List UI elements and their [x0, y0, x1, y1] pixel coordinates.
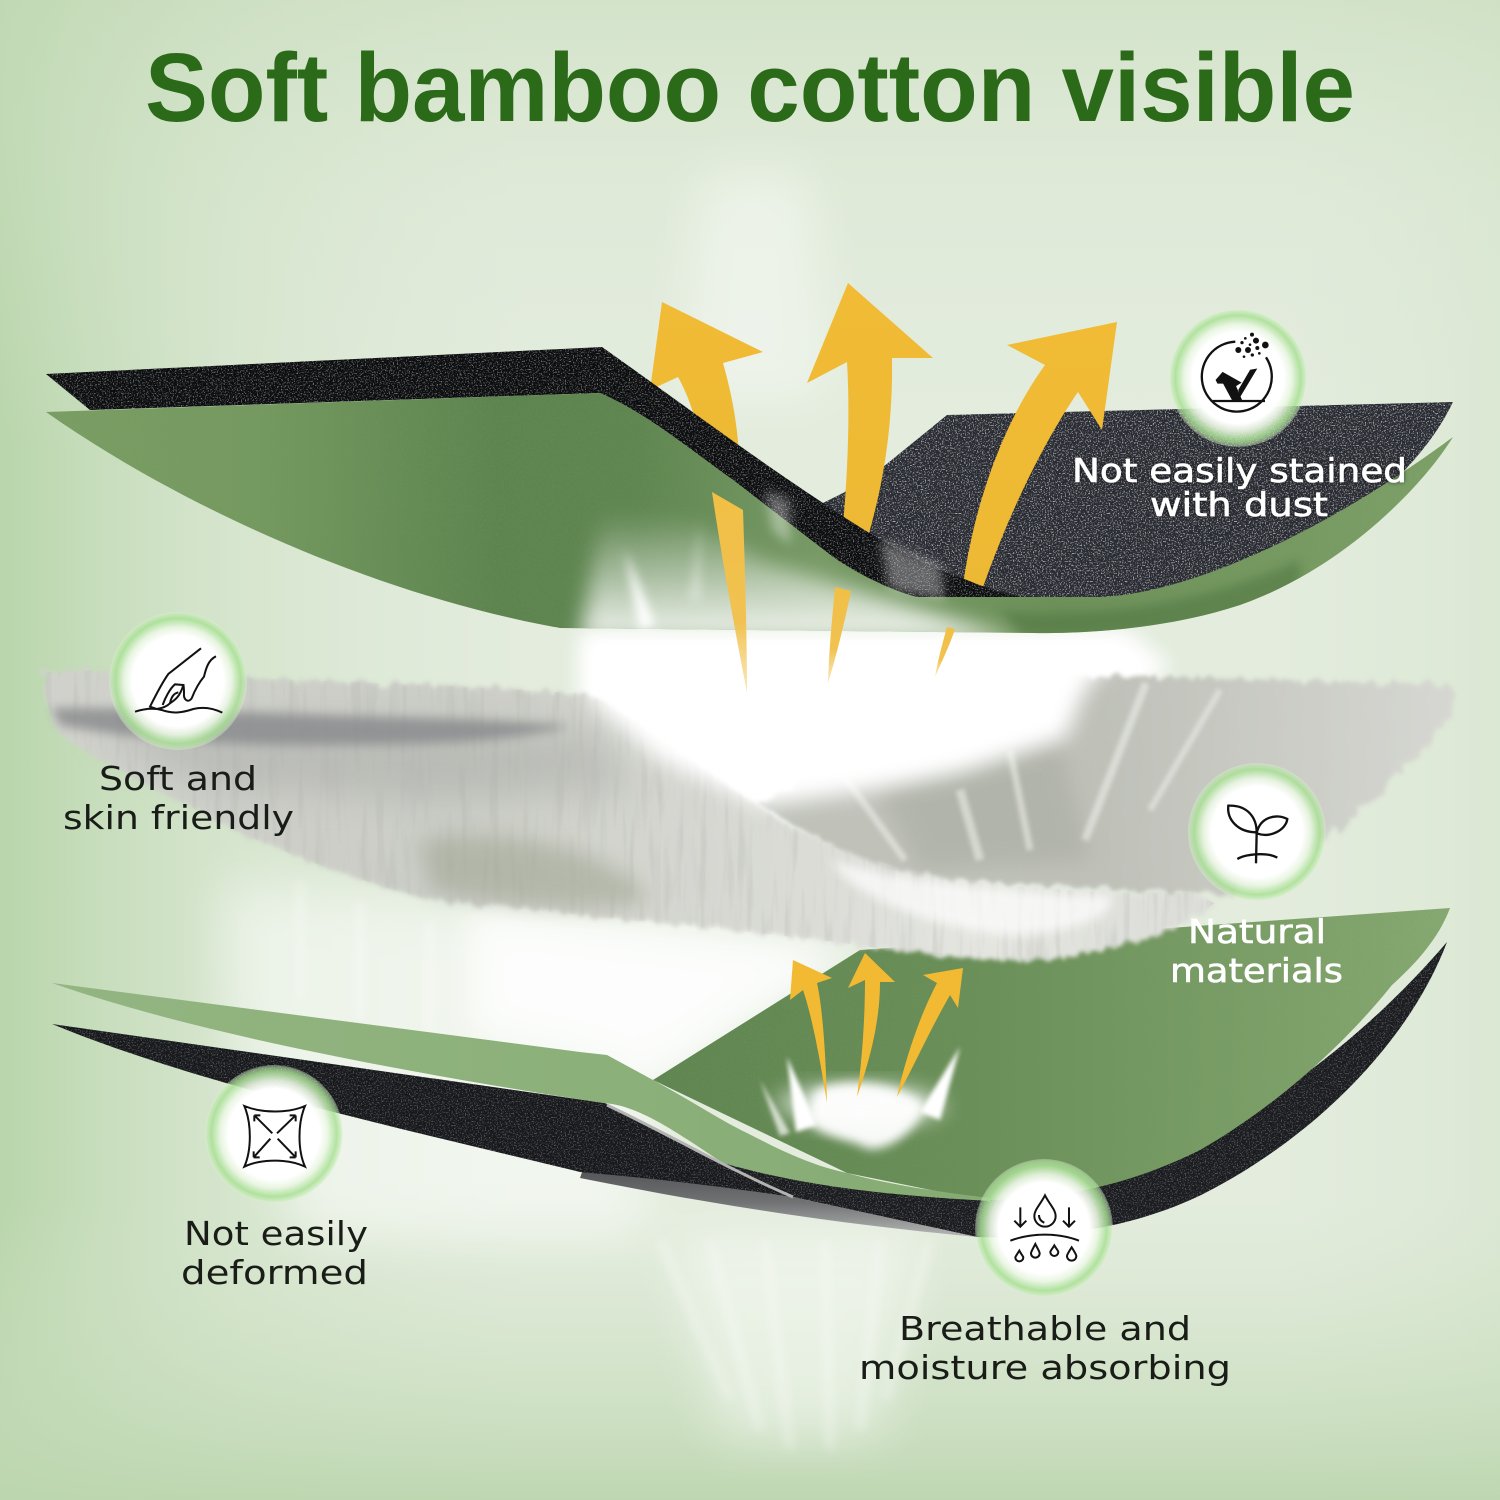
- label: soft and skin friendly: skin friendly: [63, 798, 294, 837]
- fibre fan ribs: [840, 683, 1220, 860]
- fleece roll body: [45, 671, 1215, 960]
- title: Soft bamboo cotton visible: [145, 33, 1355, 142]
- arrow 1 tail: [712, 492, 747, 693]
- label: not easily deformed: Not easily: [184, 1214, 368, 1253]
- white backdrop below fleece: [470, 905, 860, 1085]
- bubble disc: [109, 612, 247, 750]
- label: breathable and moisture absorbing: Breathable and: [899, 1309, 1191, 1348]
- green front band: [52, 983, 990, 1201]
- centre white glow: [580, 632, 1170, 830]
- vertical streaks: lower mist: [300, 880, 930, 1450]
- label: natural materials: materials: [1170, 951, 1343, 990]
- dark fleece band: [52, 708, 570, 745]
- green back grain: [653, 908, 1450, 1200]
- label: not easily stained: with dust: [1150, 485, 1328, 524]
- dark fabric speckle: [823, 402, 1453, 600]
- label: natural materials: [1170, 912, 1343, 990]
- bubble: not easily stained: [1169, 309, 1307, 447]
- icon: moisture drops: [1010, 1195, 1079, 1261]
- bubble disc: [1188, 763, 1326, 901]
- green grain and shade: [562, 506, 1303, 634]
- arrow 3: [963, 322, 1117, 590]
- label: not easily stained: [1072, 451, 1407, 524]
- fleece middle layer: [45, 671, 1454, 960]
- arrow 2 tail: [828, 587, 851, 683]
- black fabric texture: [52, 942, 1447, 1237]
- grey fade under fold: [580, 1120, 977, 1237]
- label: soft and skin friendly: Soft and: [99, 759, 257, 798]
- fibre fan panel: [760, 672, 1454, 895]
- white cloud over fleece: [590, 640, 1130, 806]
- arrows: large lower fragments: [712, 492, 955, 693]
- soft shade below band: [90, 725, 640, 800]
- dark fabric panel: [823, 402, 1453, 600]
- label: not easily deformed: deformed: [181, 1253, 368, 1292]
- black band speckle: [46, 347, 1033, 600]
- arrows: large upper parts: [650, 283, 1117, 590]
- small arrow 3: [897, 968, 963, 1097]
- green back panel: [653, 908, 1450, 1200]
- label: soft and skin friendly: [63, 759, 294, 837]
- icon: hand pressing: [135, 648, 222, 713]
- bubble disc: [1169, 309, 1307, 447]
- small arrow 1: [790, 960, 832, 1103]
- black band: [46, 347, 1033, 600]
- bubble: natural: [1188, 763, 1326, 901]
- grey-green shade: [420, 836, 650, 907]
- fleece fibre texture: [45, 671, 1215, 960]
- icon: stretch square: [244, 1106, 305, 1167]
- bubble: soft: [109, 612, 247, 750]
- mist streaks: background: [220, 170, 920, 1440]
- black front layer: [52, 1024, 793, 1197]
- mist over fabric fold: [625, 490, 945, 630]
- arrow 3 tail: [935, 627, 955, 677]
- label: breathable and moisture absorbing: moisture absorbing: [859, 1348, 1231, 1387]
- fold edge line: [607, 1105, 793, 1197]
- arrow 2: [807, 283, 933, 540]
- bubble disc: [975, 1159, 1113, 1297]
- fan panel shade: [880, 740, 1090, 870]
- bubble disc: [205, 1065, 343, 1203]
- steam puff: [760, 1047, 960, 1149]
- label: breathable and moisture absorbing: [859, 1309, 1231, 1387]
- small arrow 2: [848, 953, 895, 1097]
- icon: sprout: [1228, 806, 1287, 863]
- bubble: breathable: [975, 1159, 1113, 1297]
- label: natural materials: Natural: [1188, 912, 1326, 951]
- bottom fabric layers: [52, 908, 1450, 1237]
- arrow 1: [650, 302, 763, 470]
- white roll highlight: [830, 860, 1111, 935]
- arrows: small upward: [790, 953, 963, 1103]
- top fabric layers: [46, 283, 1453, 640]
- green upper layer: [46, 393, 1453, 633]
- black back layer: [723, 942, 1447, 1237]
- bubble: not deformed: [205, 1065, 343, 1203]
- label: not easily stained: Not easily stained: [1072, 451, 1407, 490]
- label: not easily deformed: [181, 1214, 368, 1292]
- icon: stain check: [1202, 333, 1272, 412]
